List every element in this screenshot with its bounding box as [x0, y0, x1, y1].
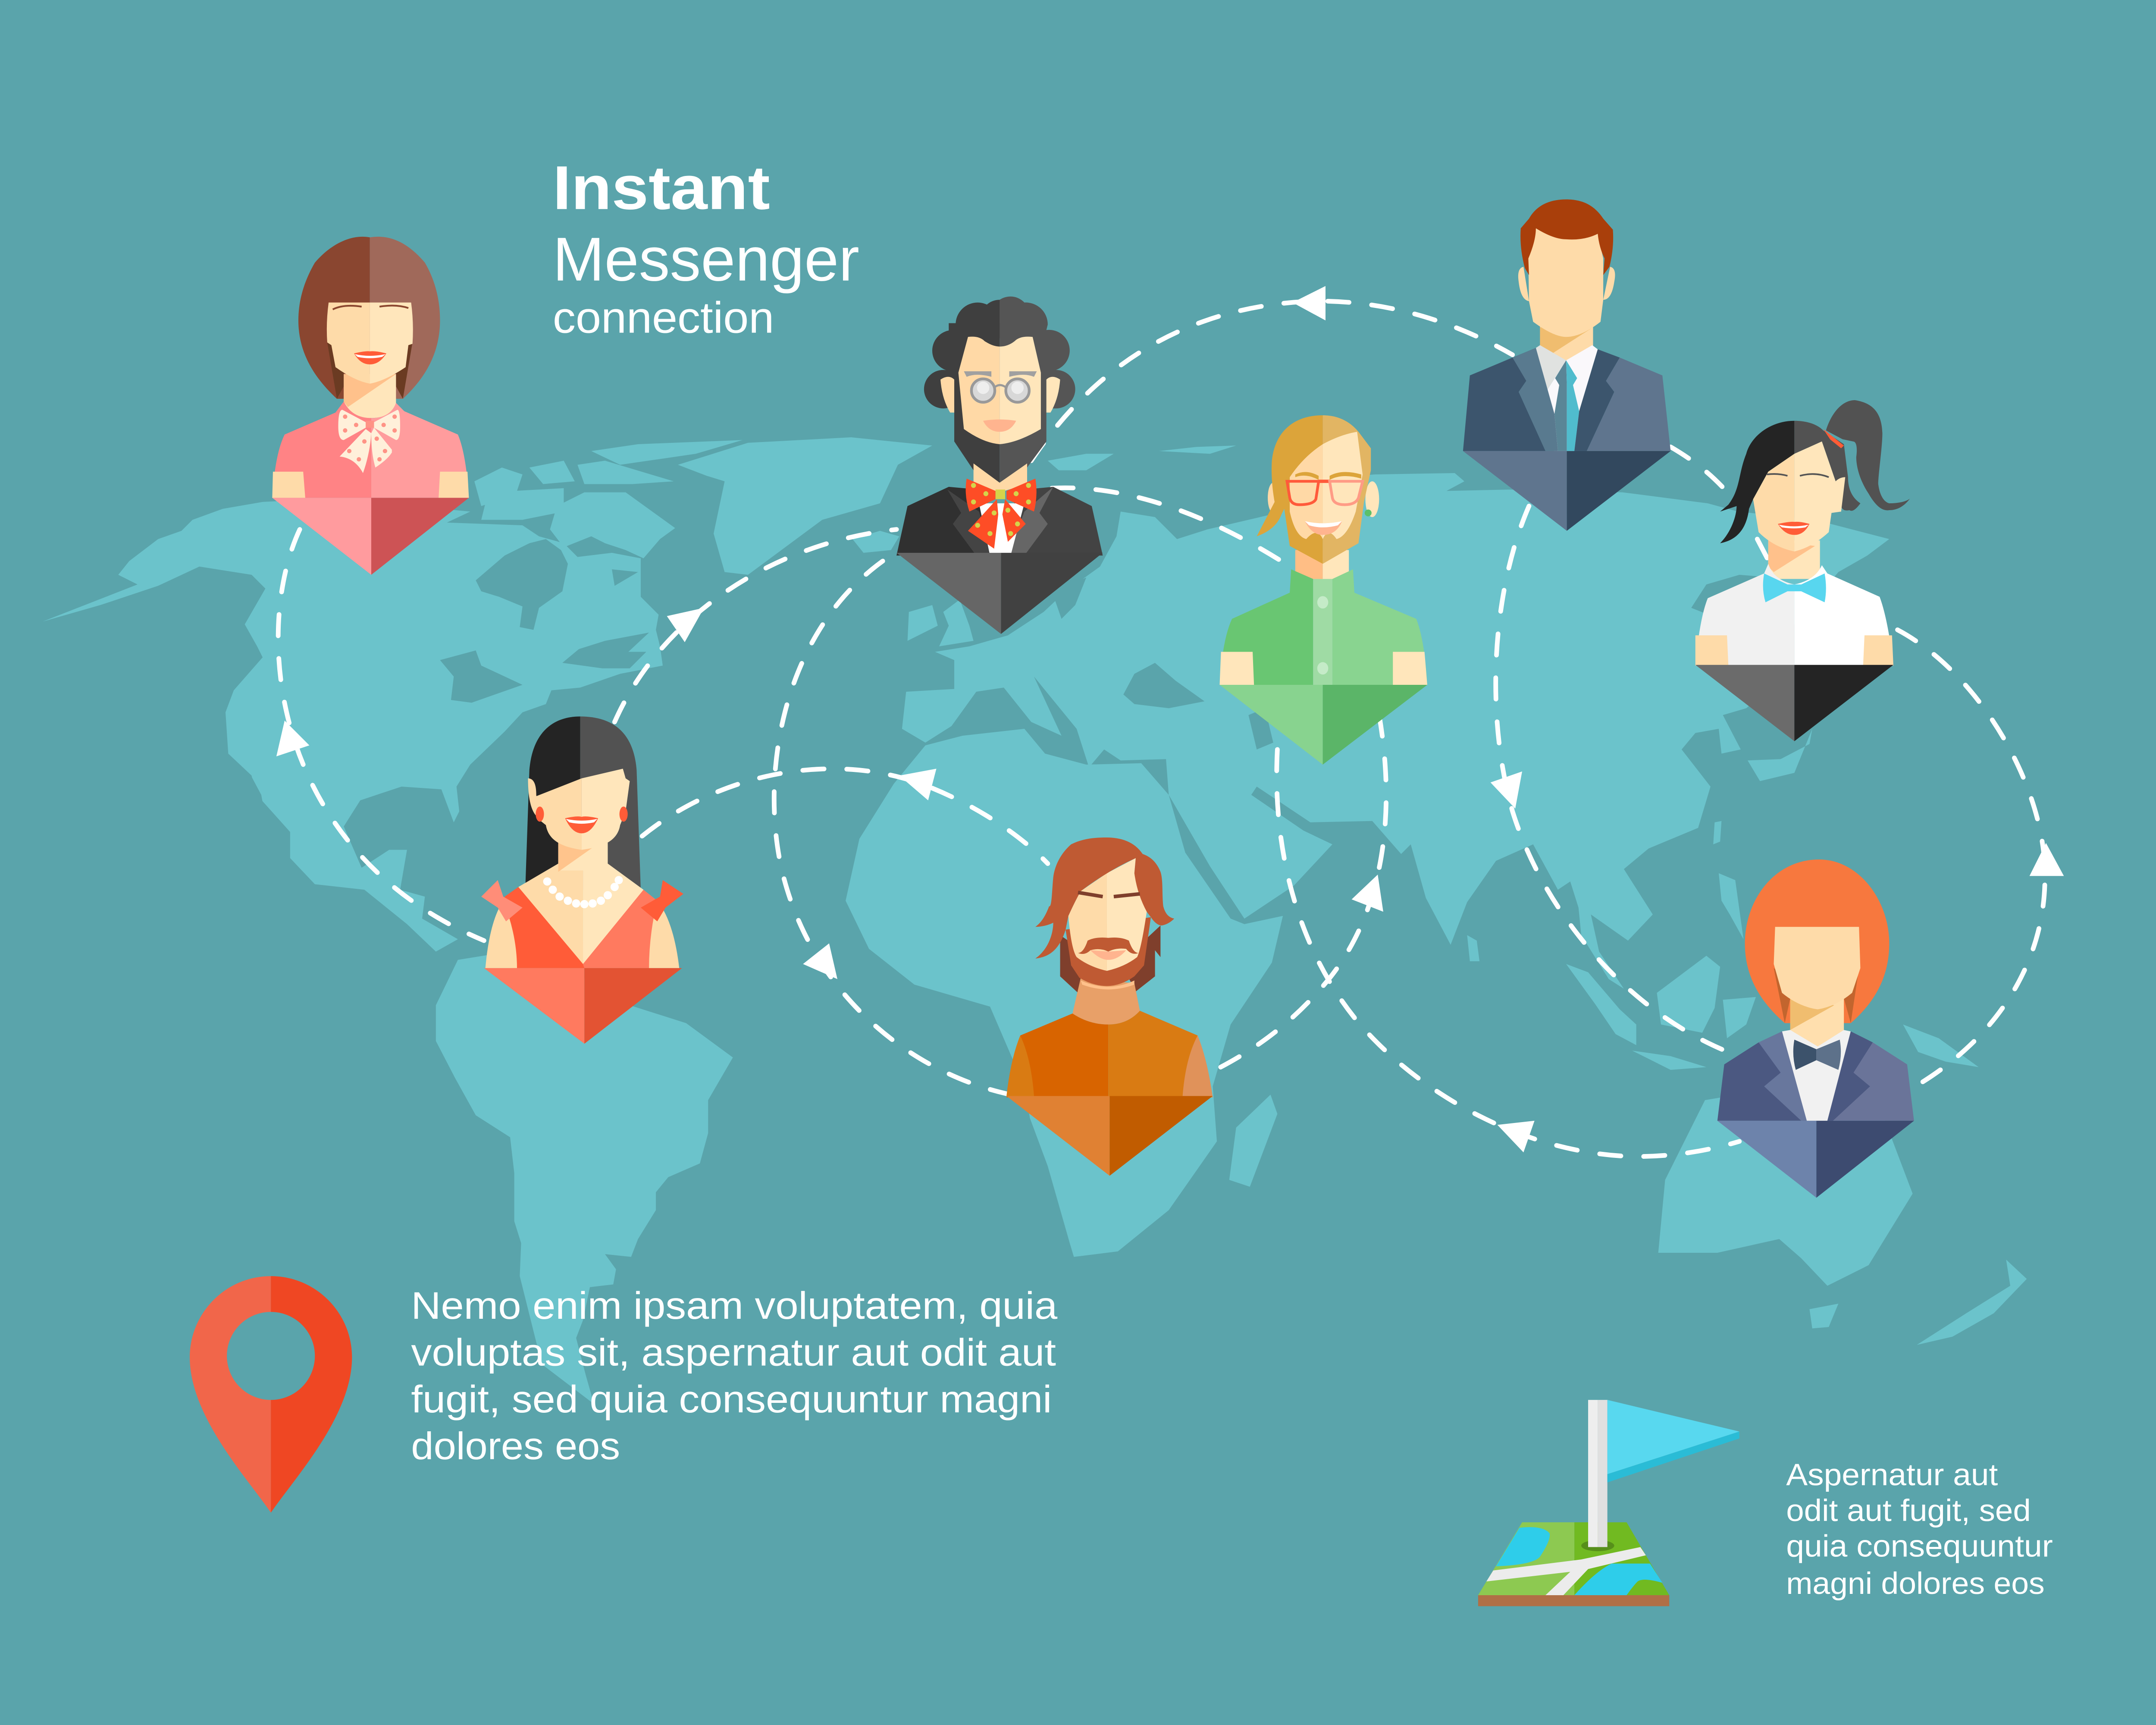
text block: main description: dolores eos — [411, 1424, 620, 1467]
text block: main description: voluptas sit, aspernatur aut odit aut — [411, 1330, 1056, 1374]
text block: flag caption: Aspernatur aut — [1786, 1458, 1998, 1492]
text block: flag caption: odit aut fugit, sed — [1786, 1493, 2031, 1528]
text block: main description: Nemo enim ipsam voluptatem, quia — [411, 1284, 1058, 1327]
dashed connection routes — [278, 301, 2045, 1157]
avatar: woman in red dress — [481, 716, 683, 1044]
text block: flag caption: quia consequuntur — [1786, 1529, 2053, 1564]
avatar: woman with orange hair — [1717, 859, 1914, 1198]
avatar: hipster in green — [1219, 415, 1427, 765]
text block: main description: fugit, sed quia consequuntur magni — [411, 1377, 1052, 1421]
route arrowheads — [276, 286, 2064, 1152]
icon: flag on map — [1478, 1400, 1739, 1606]
icon: location pin — [190, 1276, 352, 1513]
avatar: man in navy suit — [1463, 199, 1670, 531]
title: Messenger — [553, 225, 859, 294]
world map — [43, 437, 2027, 1404]
text block: flag caption: magni dolores eos — [1786, 1566, 2045, 1601]
text block: main description — [411, 1284, 1058, 1467]
avatar: woman with ponytail — [1695, 400, 1910, 741]
avatar: bearded man in orange — [1006, 837, 1213, 1176]
title — [553, 154, 859, 342]
avatar: woman in pink — [272, 237, 469, 575]
title: Instant — [553, 154, 770, 223]
avatar: bearded man with bow tie — [896, 297, 1103, 634]
title: connection — [553, 293, 774, 342]
text block: flag caption — [1786, 1458, 2053, 1601]
